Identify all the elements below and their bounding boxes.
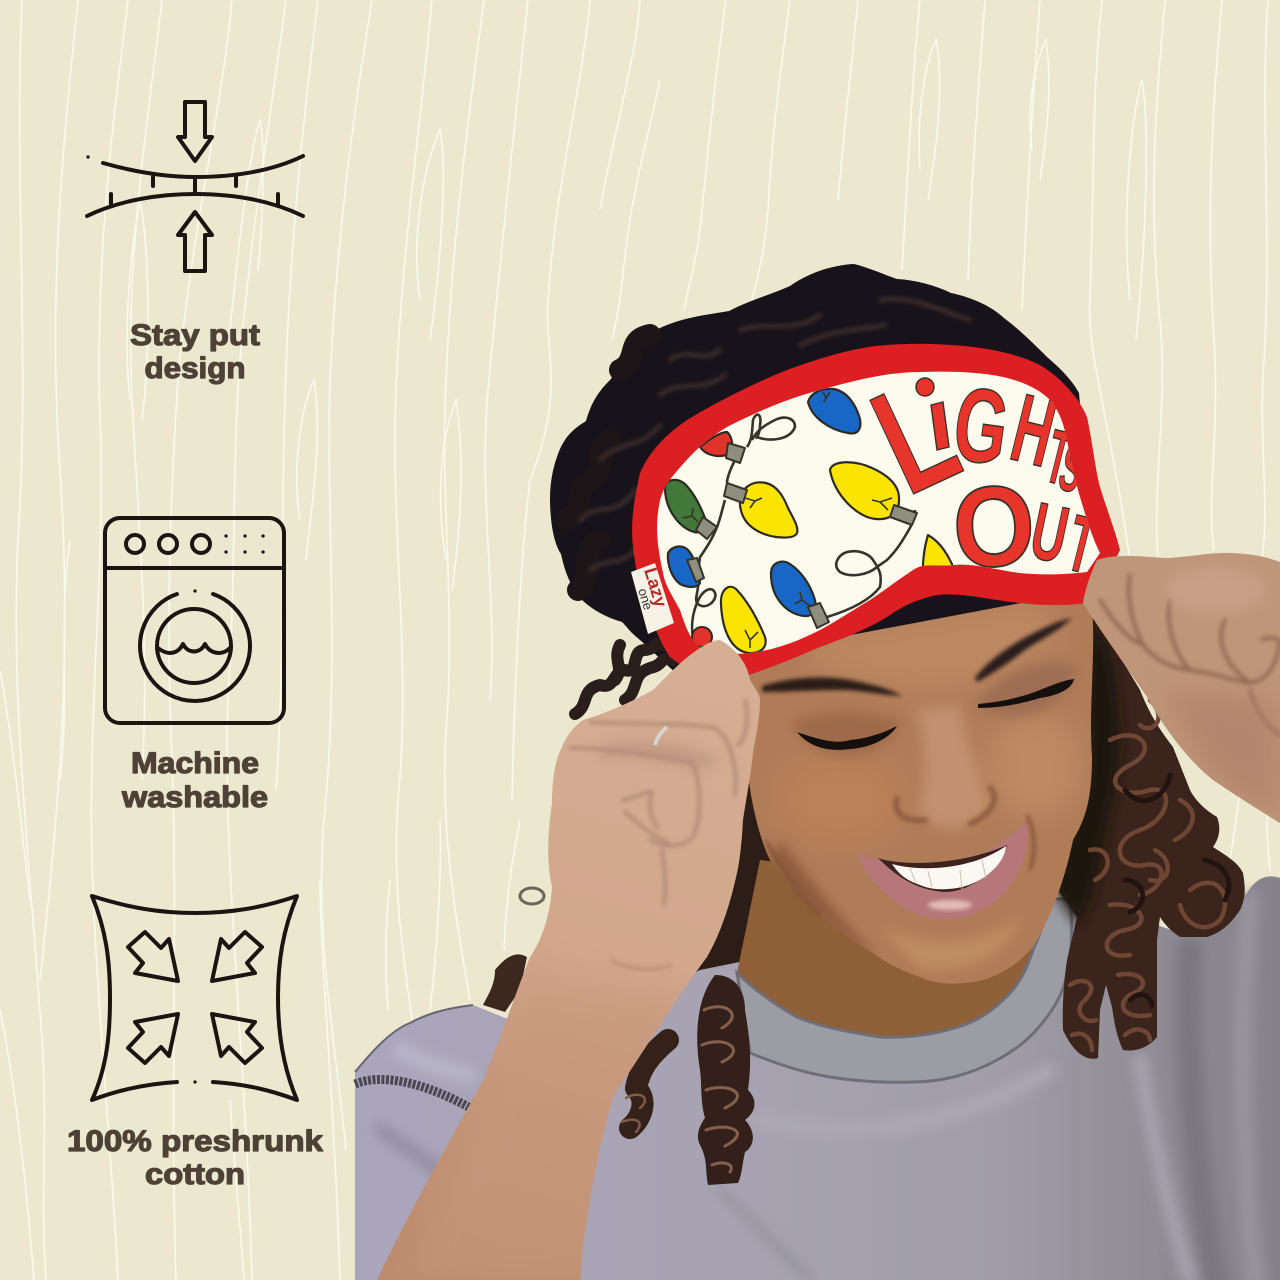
lettering: out: U <box>1023 485 1076 580</box>
lettering: out <box>956 485 1090 572</box>
mouth: cheek crease <box>766 815 1034 915</box>
socket: blue bottom <box>808 603 829 628</box>
bulb: blue left <box>668 546 700 587</box>
mask: printed artwork <box>664 377 1090 654</box>
forearm and left hand <box>377 640 760 1280</box>
mouth: tooth lines <box>910 860 986 889</box>
socket: blue left <box>687 558 704 582</box>
shirt: shoulder seam <box>355 1005 473 1072</box>
cord: right loop <box>827 510 915 617</box>
lettering: out: T <box>1059 497 1105 591</box>
mouth: lip highlight <box>928 900 972 910</box>
lettering: lights: S <box>1052 429 1091 508</box>
bulb: red lower <box>692 627 712 647</box>
socket: yellow left <box>724 483 747 503</box>
right hand <box>1083 553 1280 823</box>
lettering: lights: T <box>1038 413 1080 501</box>
label: 100% preshrunk cotton: cotton <box>145 1158 245 1191</box>
mask: woven tag <box>631 563 674 634</box>
icon: shrinking fabric <box>92 896 297 1100</box>
bulb: yellow middle <box>830 462 899 519</box>
lettering: lights: H <box>1002 373 1066 488</box>
socket: yellow middle <box>890 505 917 525</box>
filament: yellow bottom <box>745 630 758 648</box>
hair: curls behind left hand <box>575 643 672 714</box>
label: 100% preshrunk cotton: 100% preshrunk <box>67 1125 323 1158</box>
bulb: green <box>665 480 706 532</box>
filament: blue bottom <box>795 592 810 606</box>
shirt: sleeve seam <box>355 1079 474 1110</box>
curl: behind wrist <box>483 954 527 1012</box>
hair: right side mass <box>1053 600 1245 1059</box>
face <box>745 590 1093 984</box>
label: stay put design: design <box>144 352 246 385</box>
left hand: ring <box>655 727 667 745</box>
mask: cream panel <box>657 372 1100 654</box>
photo: woman wearing sleep mask <box>355 264 1280 1280</box>
filament: yellow left <box>745 498 762 508</box>
lettering: lights <box>869 377 1077 495</box>
bulb: yellow right <box>922 534 954 566</box>
mask: red piping <box>632 344 1120 680</box>
filament: green <box>683 508 698 522</box>
mouth: lips <box>857 820 1027 919</box>
curl: stray ring <box>520 888 544 904</box>
brow: right <box>975 618 1072 682</box>
bulb: blue top <box>808 389 860 433</box>
filament: yellow middle <box>872 498 892 510</box>
feature: stay put design <box>87 102 303 385</box>
mask: woven tag: one <box>635 586 656 612</box>
brow: left <box>762 678 902 696</box>
curl: long ringlet <box>697 975 754 1185</box>
left hand: shading <box>400 700 747 1280</box>
string of lights cord <box>692 415 795 645</box>
mouth: teeth <box>892 846 1006 889</box>
hair: top highlights <box>580 299 970 570</box>
filament: blue top <box>823 392 830 402</box>
hair: right curl texture <box>1070 700 1225 1050</box>
hair: right dark curl shadows <box>1125 775 1229 1005</box>
curl: small ringlet <box>630 1040 668 1128</box>
face: soft shading <box>770 600 1081 969</box>
bulb: red top <box>700 432 732 456</box>
socket: red top <box>726 443 745 463</box>
shirt <box>355 876 1280 1280</box>
label: machine washable: Machine <box>131 747 259 780</box>
mouth: dark gap <box>878 845 1007 892</box>
sleep mask <box>631 344 1120 680</box>
mask: woven tag: Lazy <box>640 565 671 609</box>
hair: dark side near face <box>1050 610 1119 925</box>
feature: machine washable <box>105 518 284 814</box>
bulb: blue bottom <box>771 562 816 616</box>
curl: ringlet highlights <box>702 1007 737 1172</box>
bulb: yellow left <box>740 482 797 538</box>
hair: back mass <box>550 264 1100 900</box>
right hand: shading <box>1100 568 1280 823</box>
lettering: out: O <box>950 462 1038 593</box>
curl: small ringlet highlights <box>622 1095 645 1132</box>
bulb: yellow bottom <box>721 587 766 653</box>
hair: lower left curls <box>483 888 754 1185</box>
socket: green <box>696 517 717 539</box>
icon: compression arrows and curves <box>87 102 303 271</box>
lashes: right <box>978 679 1074 708</box>
collar <box>737 898 1072 1082</box>
label: stay put design: Stay put <box>130 319 260 352</box>
icon: washing machine <box>105 518 284 723</box>
hair: lower left mass <box>630 740 790 1075</box>
lettering: lights: G <box>947 364 1016 488</box>
feature: 100% preshrunk cotton <box>67 896 323 1191</box>
neck <box>737 860 1048 1037</box>
shirt: folds <box>380 900 1255 1280</box>
lettering: lights: L <box>850 346 980 526</box>
label: machine washable: washable <box>121 781 268 814</box>
nose shadow <box>896 788 994 824</box>
hair: left curl bumps <box>565 335 650 590</box>
lashes: left <box>797 726 897 750</box>
